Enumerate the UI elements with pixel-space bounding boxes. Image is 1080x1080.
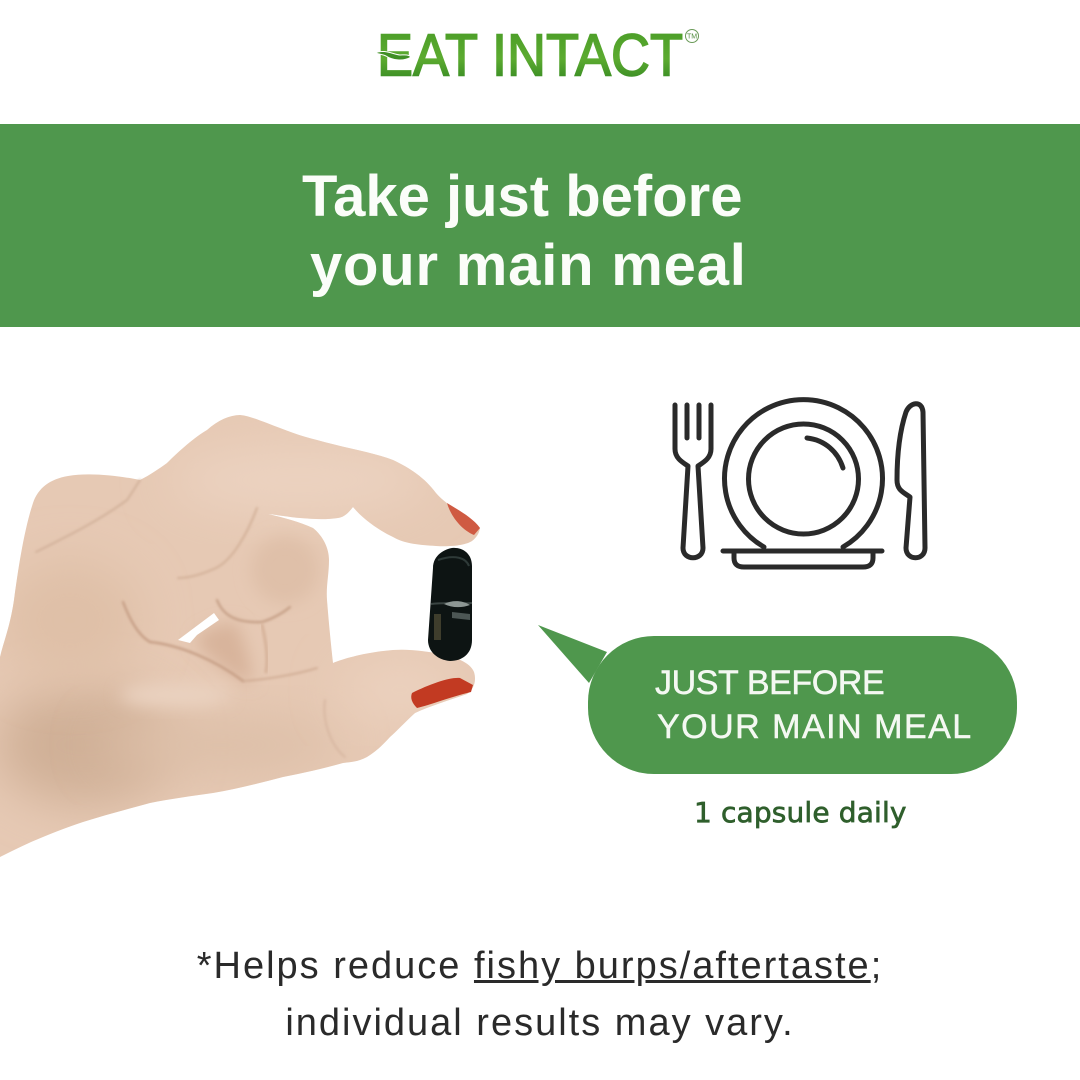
plate: [724, 400, 883, 547]
capsule: [428, 548, 472, 661]
bubble body: [588, 636, 1017, 774]
banner heading: Take just before: [302, 164, 742, 229]
disclaimer: [197, 945, 883, 1044]
plate well: [748, 424, 858, 534]
logo: EAT INTACT: TM: [687, 34, 697, 40]
fingernail bottom: [411, 678, 473, 708]
gap between fingers: [178, 613, 219, 643]
speech bubble: [538, 625, 1017, 774]
hand holding capsule illustration: [0, 415, 480, 857]
bubble text: JUST BEFORE: [655, 664, 884, 702]
banner heading: your main meal: [310, 233, 747, 298]
disclaimer: individual results may vary.: [285, 1002, 795, 1044]
banner heading: [302, 164, 747, 298]
dosage caption: 1 capsule daily: [694, 796, 907, 829]
knife: [897, 404, 925, 558]
fork: [675, 405, 711, 558]
icon: plate with fork and knife: [672, 397, 928, 570]
disclaimer: *Helps reduce fishy burps/aftertaste;: [197, 945, 883, 987]
saucer: [723, 551, 882, 567]
finger creases: [36, 480, 345, 757]
bubble text: [655, 664, 973, 746]
plate highlight: [807, 438, 843, 468]
fingernail top: [447, 503, 480, 535]
bubble tail: [538, 625, 607, 683]
bubble text: YOUR MAIN MEAL: [657, 708, 973, 746]
banner: [0, 124, 1080, 327]
